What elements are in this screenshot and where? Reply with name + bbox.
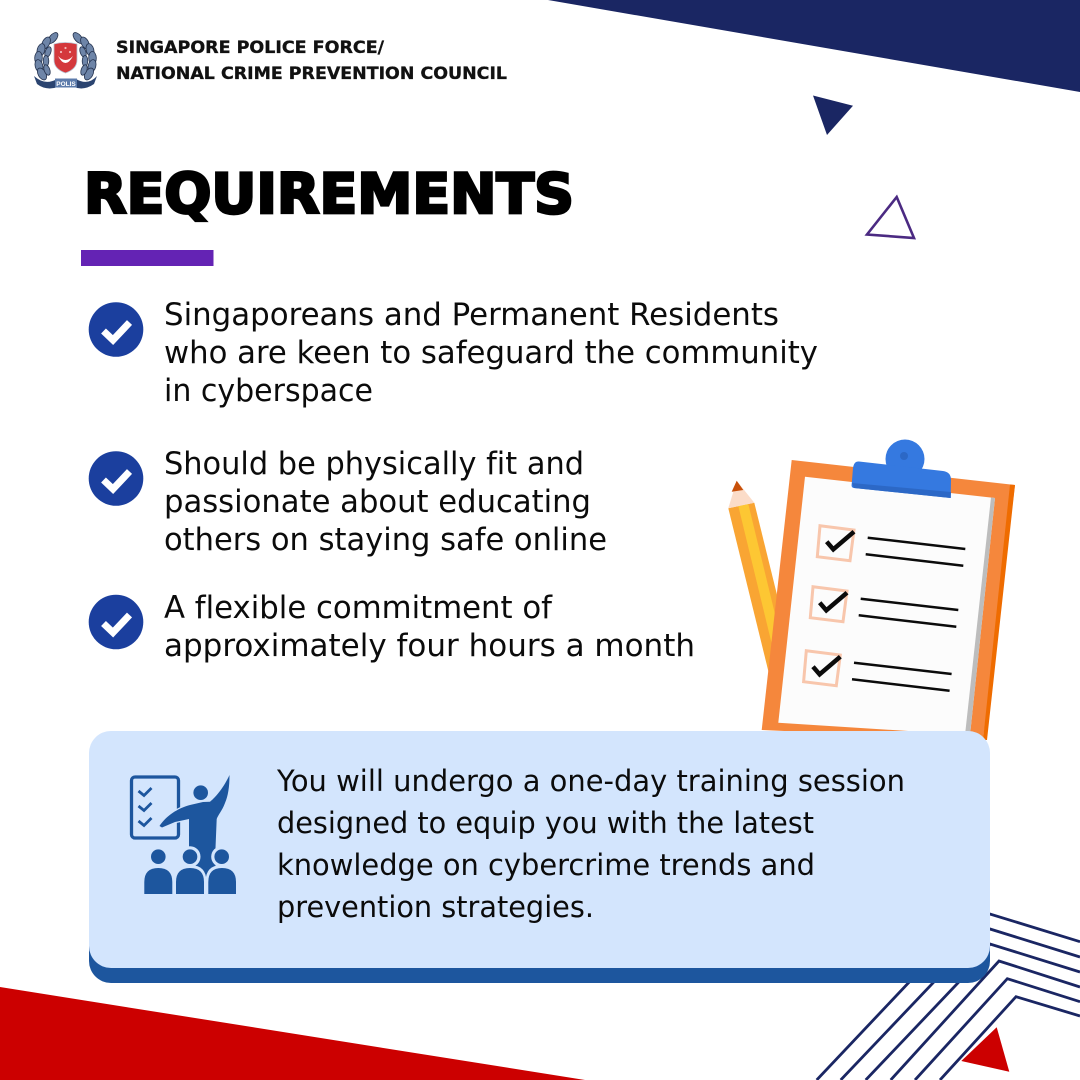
- bottom left red banner: [0, 987, 585, 1080]
- requirement 2: [89, 446, 607, 558]
- callout text: knowledge on cybercrime trends and: [277, 848, 815, 882]
- icon: trainer with audience: [132, 775, 238, 896]
- requirement 1 text: Singaporeans and Permanent Residents: [164, 297, 779, 333]
- requirement 1: [89, 297, 818, 409]
- clipboard clip: [852, 440, 951, 498]
- requirement 2 text: Should be physically fit and: [164, 446, 584, 482]
- top right navy banner: [548, 0, 1080, 92]
- callout text: [276, 764, 905, 924]
- requirement 2 text: others on staying safe online: [164, 522, 607, 558]
- red triangle: [961, 1027, 1009, 1072]
- icon: clipboard: [762, 440, 1015, 740]
- title underline: [81, 250, 214, 266]
- header organisation text: NATIONAL CRIME PREVENTION COUNCIL: [116, 64, 507, 84]
- requirement 3 text: A flexible commitment of: [164, 590, 553, 626]
- police crest logo: [34, 31, 97, 88]
- police crest logo: POLIS: [56, 81, 76, 88]
- requirement 3 text: approximately four hours a month: [164, 628, 695, 664]
- requirement 1 text: who are keen to safeguard the community: [164, 335, 818, 371]
- requirement 1 text: in cyberspace: [164, 373, 373, 409]
- title: REQUIREMENTS: [84, 162, 574, 226]
- illustration: pencil and clipboard: [728, 440, 1015, 740]
- requirement 2 text: [164, 446, 607, 558]
- callout text: prevention strategies.: [277, 890, 594, 924]
- requirement 3: [89, 590, 695, 664]
- icon: check badge: [89, 595, 143, 649]
- requirement 1 text: [164, 297, 818, 409]
- header organisation text: [116, 38, 507, 84]
- panel: training callout: [89, 731, 990, 983]
- callout text: You will undergo a one-day training session: [276, 764, 905, 798]
- outlined purple triangle: [867, 197, 914, 238]
- callout shadow: [89, 745, 990, 983]
- checklist row 1: [817, 526, 965, 566]
- diagonal line pattern: [817, 914, 1080, 1080]
- checklist row 3: [804, 651, 952, 691]
- header organisation text: SINGAPORE POLICE FORCE/: [116, 38, 385, 58]
- callout card: [89, 731, 990, 968]
- icon: check badge: [89, 302, 143, 357]
- requirement 3 text: [164, 590, 695, 664]
- callout text: designed to equip you with the latest: [277, 806, 814, 840]
- requirement 2 text: passionate about educating: [164, 484, 591, 520]
- navy triangle: [813, 96, 853, 135]
- icon: check badge: [89, 451, 143, 506]
- checklist row 2: [810, 587, 958, 627]
- icon: pencil: [728, 481, 798, 686]
